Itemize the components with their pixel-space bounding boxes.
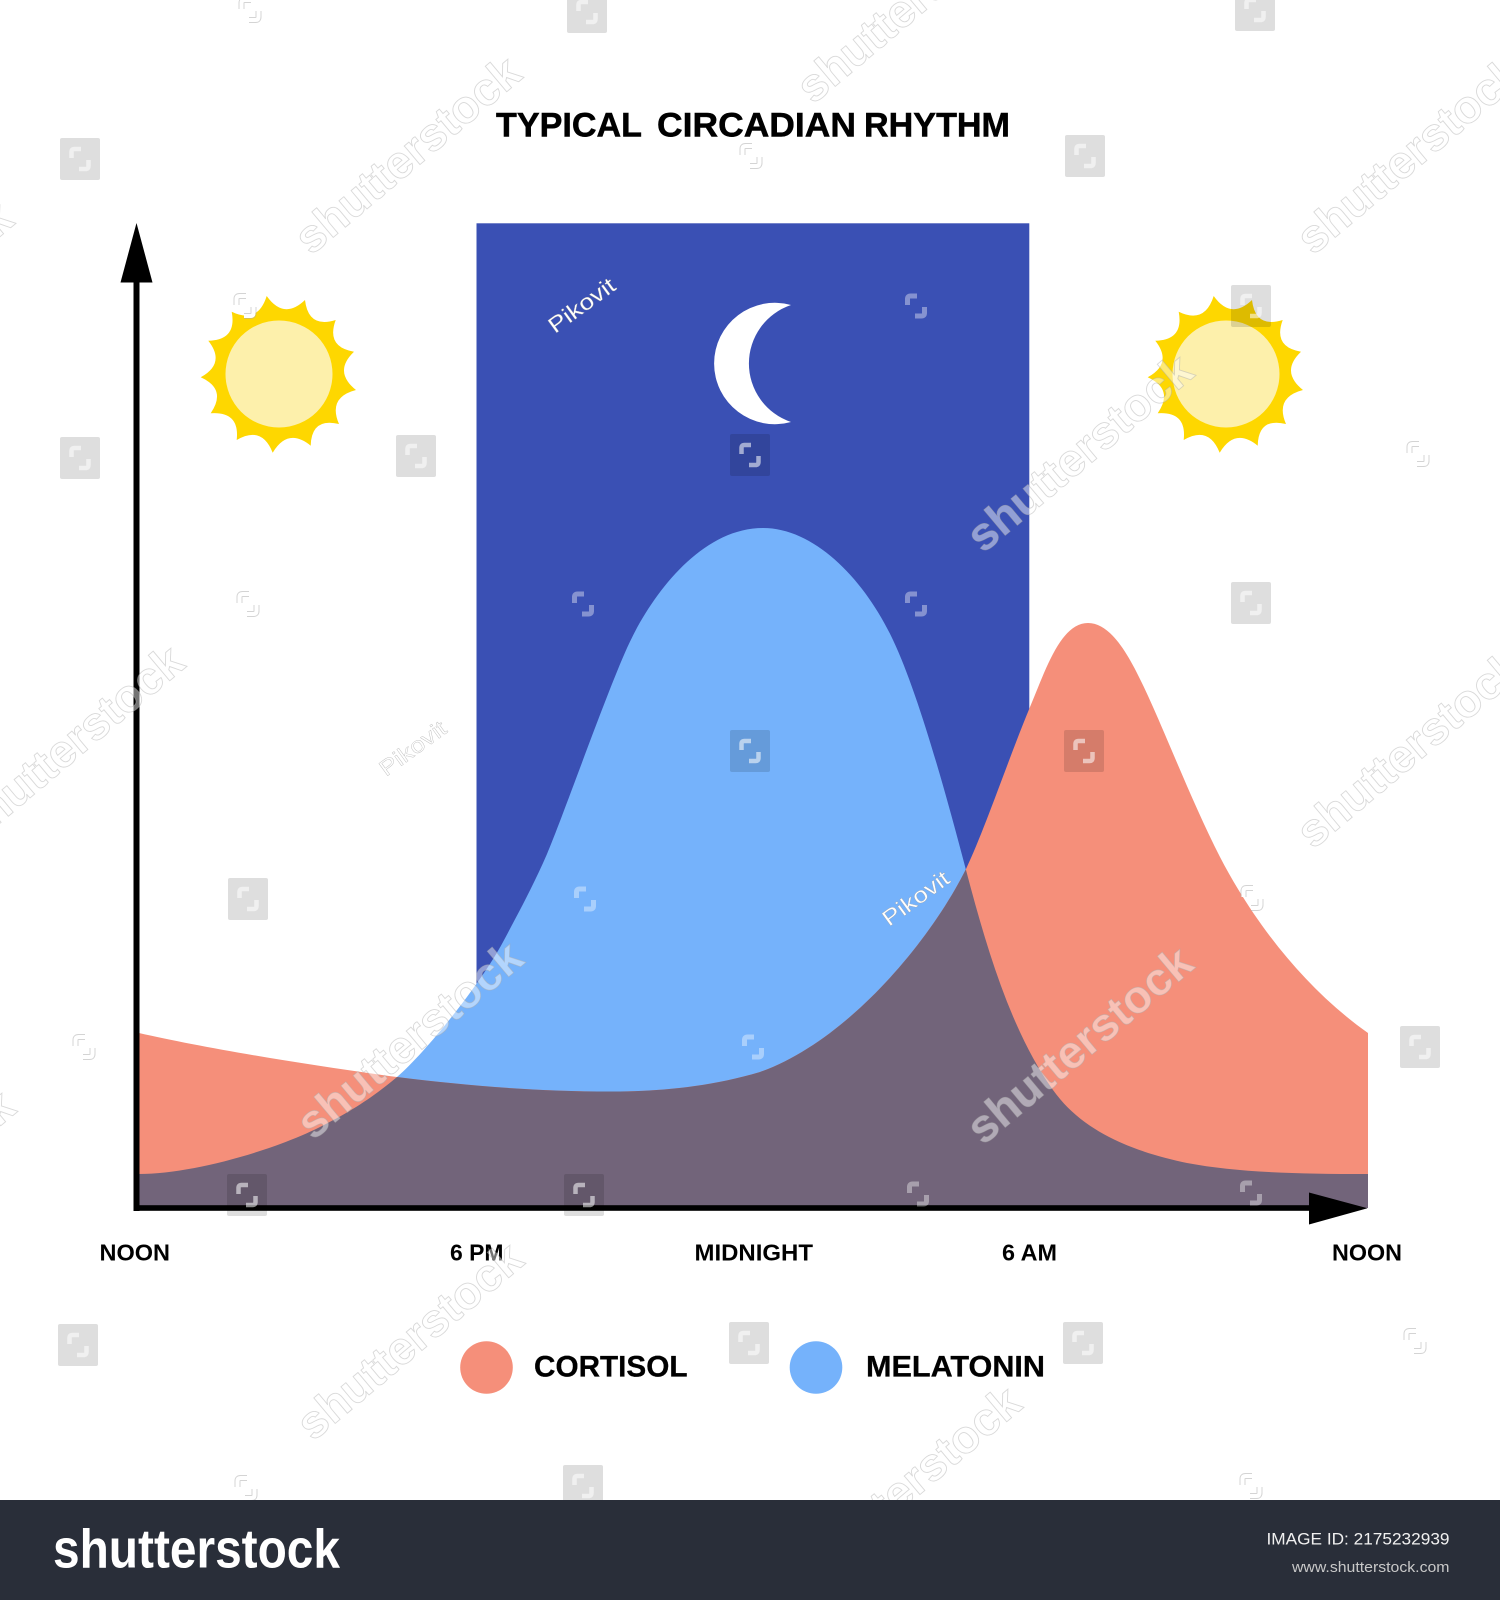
melatonin curve <box>139 528 1368 1208</box>
watermark: Pikovit credits: Pikovit <box>374 716 451 781</box>
footer logo: shutterstock <box>53 1518 340 1580</box>
legend: cortisol: CORTISOL <box>534 1350 688 1384</box>
axis labels: 6 PM <box>450 1240 504 1266</box>
title: CIRCADIAN <box>657 106 856 144</box>
watermark: shutterstock text pattern: shutterstock <box>286 1231 533 1450</box>
legend: melatonin: MELATONIN <box>866 1350 1045 1384</box>
title: RHYTHM <box>864 106 1010 144</box>
watermark: shutterstock text pattern: shutterstock <box>286 930 533 1149</box>
legend: melatonin <box>790 1341 1045 1394</box>
watermark: shutterstock text pattern: shutterstock <box>956 935 1203 1154</box>
overlap region <box>140 869 1368 1208</box>
watermark: shutterstock text pattern: shutterstock <box>784 1375 1031 1594</box>
watermark: shutterstock text pattern: shutterstock <box>284 45 531 264</box>
axis labels: 6 AM <box>1002 1240 1057 1266</box>
watermark: shutterstock text pattern: shutterstock <box>956 343 1203 562</box>
axis labels: NOON <box>1332 1240 1402 1266</box>
title: TYPICAL <box>496 106 642 144</box>
legend: cortisol <box>460 1341 688 1394</box>
axis labels: MIDNIGHT <box>694 1240 813 1266</box>
footer image id: IMAGE ID: 2175232939 <box>1266 1530 1450 1548</box>
icon: moon <box>714 303 791 424</box>
x axis arrow <box>134 1192 1368 1224</box>
footer url: www.shutterstock.com <box>1291 1559 1450 1576</box>
icon: left sun <box>201 296 356 453</box>
chart: hormone curves <box>139 528 1368 1208</box>
axis labels: NOON <box>100 1240 170 1266</box>
footer bar <box>0 1500 1500 1600</box>
watermark: Pikovit credits <box>374 273 954 931</box>
watermark: Pikovit credits: Pikovit <box>877 866 954 931</box>
axis labels <box>100 1240 1402 1266</box>
watermark: Pikovit credits: Pikovit <box>543 273 620 338</box>
cortisol curve <box>139 623 1368 1208</box>
legend <box>460 1341 1045 1394</box>
y axis arrow <box>120 223 152 1211</box>
icon: right sun <box>1148 296 1303 453</box>
night panel <box>476 223 1029 1023</box>
